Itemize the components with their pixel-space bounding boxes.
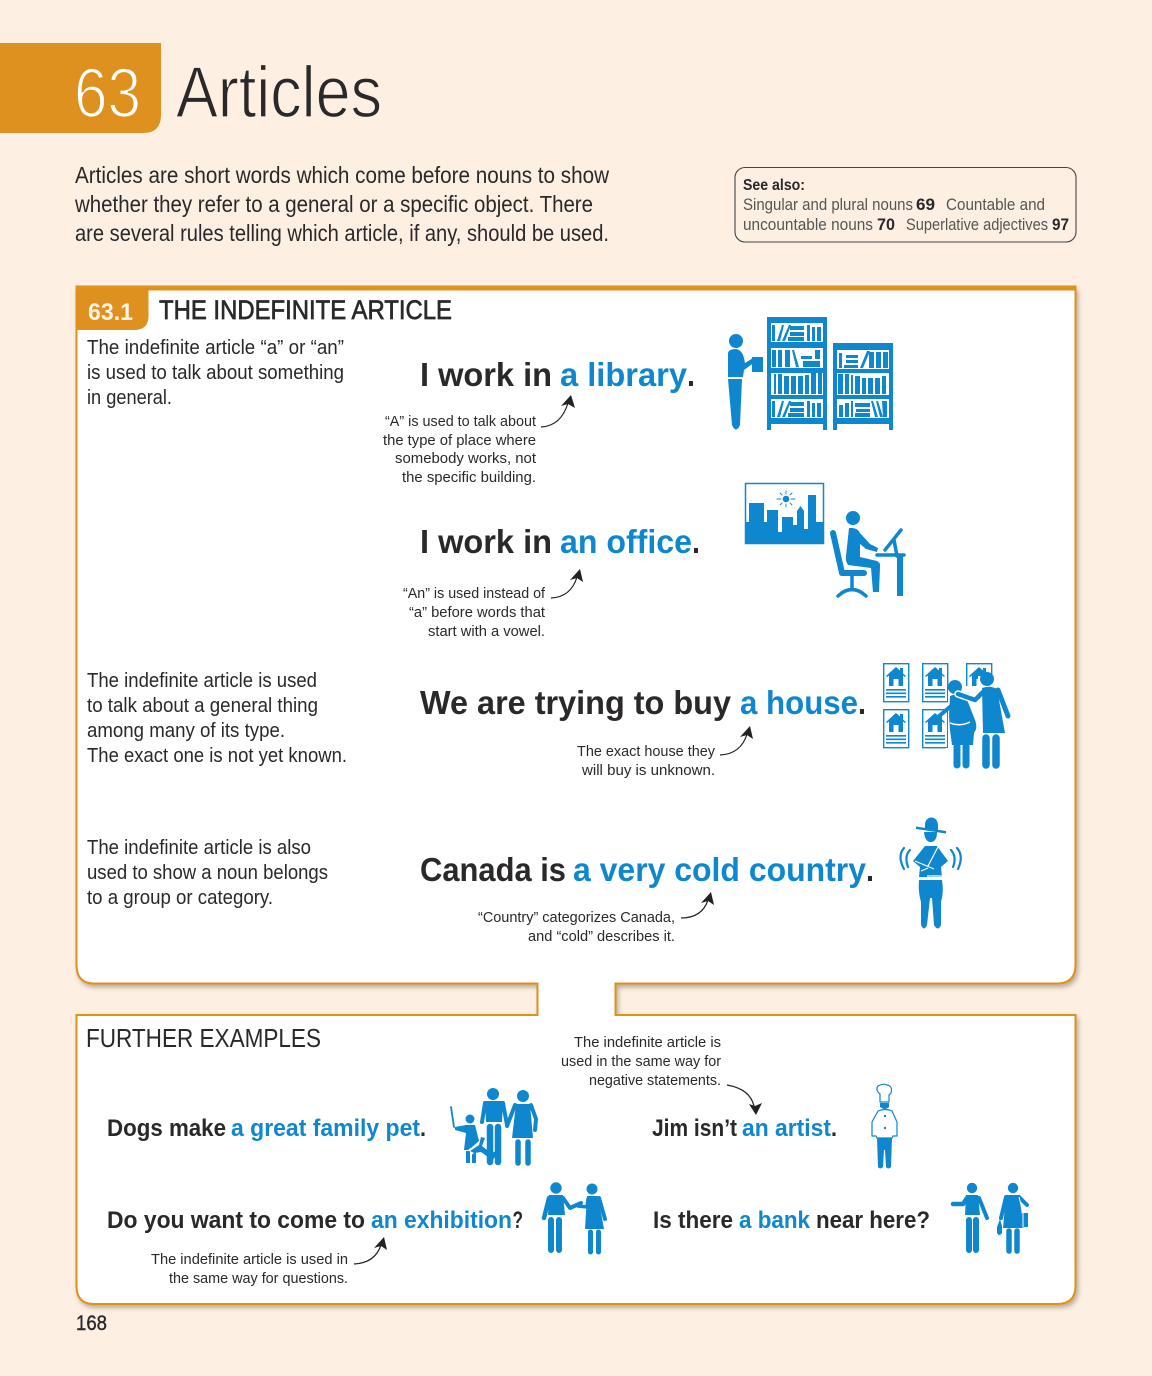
example: artist: Jim isn’t bbox=[652, 1115, 737, 1142]
sentence: library: . bbox=[687, 356, 695, 393]
example: bank: near here? bbox=[816, 1207, 930, 1234]
icon: person at desk bbox=[833, 511, 904, 596]
see also box: 70 bbox=[877, 216, 895, 234]
example: bank bbox=[653, 1207, 930, 1234]
sentence: office bbox=[420, 523, 700, 560]
example: exhibition: Do you want to come to bbox=[107, 1207, 365, 1234]
explanation 2: The indefinite article is used bbox=[87, 670, 317, 692]
sentence: library bbox=[420, 356, 695, 393]
sentence: library: I work in bbox=[420, 356, 552, 393]
note: Canada bbox=[478, 909, 675, 945]
example: exhibition bbox=[107, 1207, 523, 1234]
intro paragraph: Articles are short words which come before nouns to show bbox=[75, 162, 609, 188]
sentence: house: We are trying to buy bbox=[420, 684, 732, 721]
arrow: questions note bbox=[354, 1237, 387, 1264]
icon: city picture bbox=[745, 484, 824, 544]
note: library: “A” is used to talk about bbox=[385, 413, 537, 430]
sentence: library: a library bbox=[560, 356, 688, 393]
note: library: somebody works, not bbox=[395, 450, 537, 467]
note: questions: the same way for questions. bbox=[169, 1270, 348, 1287]
see also box bbox=[735, 168, 1076, 242]
example: bank: a bank bbox=[739, 1207, 811, 1234]
see also box: 97 bbox=[1052, 216, 1069, 234]
example: artist: an artist bbox=[742, 1115, 831, 1142]
example: exhibition: ? bbox=[512, 1207, 523, 1234]
note: negative statements bbox=[561, 1034, 721, 1089]
explanation 3: to a group or category. bbox=[87, 887, 273, 909]
page number: 168 bbox=[76, 1312, 107, 1335]
note: house bbox=[577, 743, 715, 779]
arrow: library note bbox=[541, 395, 575, 427]
note: Canada: and “cold” describes it. bbox=[528, 928, 675, 945]
note: office: “An” is used instead of bbox=[403, 585, 546, 602]
main panel outline with connector bbox=[76, 288, 1076, 1304]
see also box: Superlative adjectives bbox=[906, 216, 1048, 234]
note: office bbox=[403, 585, 546, 640]
header tab: chapter number: 63 bbox=[74, 54, 141, 132]
explanation 2: among many of its type. bbox=[87, 720, 285, 742]
example: dogs: a great family pet bbox=[231, 1115, 420, 1142]
explanation 3: The indefinite article is also bbox=[87, 837, 311, 859]
panel top rule bbox=[76, 286, 1076, 290]
note: negative statements: negative statements. bbox=[589, 1072, 721, 1089]
explanation 2 bbox=[87, 670, 347, 767]
example: bank: Is there bbox=[653, 1207, 733, 1234]
sentence: house: . bbox=[858, 684, 866, 721]
intro paragraph bbox=[74, 162, 609, 246]
explanation 1: in general. bbox=[87, 387, 172, 409]
see also box: Countable and bbox=[946, 196, 1045, 214]
icon: couple talking about exhibition bbox=[544, 1182, 605, 1252]
sentence: Canada: Canada is bbox=[420, 851, 566, 888]
sentence: office: I work in bbox=[420, 523, 552, 560]
explanation 3: used to show a noun belongs bbox=[87, 862, 328, 884]
sentence: Canada bbox=[420, 851, 874, 888]
see also box: uncountable nouns bbox=[743, 216, 873, 234]
explanation 2: to talk about a general thing bbox=[87, 695, 318, 717]
note: library bbox=[383, 413, 537, 486]
note: questions bbox=[151, 1251, 348, 1287]
sentence: Canada: . bbox=[866, 851, 874, 888]
note: library: the specific building. bbox=[402, 469, 536, 486]
example: artist: . bbox=[831, 1115, 837, 1142]
arrow: Canada note bbox=[681, 892, 714, 918]
see also box: See also: bbox=[743, 177, 805, 194]
example: dogs bbox=[107, 1115, 426, 1142]
example: dogs: . bbox=[420, 1115, 426, 1142]
header tab: chapter number bbox=[0, 43, 161, 133]
intro paragraph: are several rules telling which article, if any, should be used. bbox=[75, 220, 609, 246]
note: questions: The indefinite article is used in bbox=[151, 1251, 348, 1268]
explanation 3 bbox=[87, 837, 328, 909]
sentence: Canada: a very cold country bbox=[573, 851, 867, 888]
see also box: 69 bbox=[916, 196, 935, 214]
explanation 1: is used to talk about something bbox=[87, 362, 344, 384]
example: exhibition: an exhibition bbox=[371, 1207, 512, 1234]
sentence: house: a house bbox=[740, 684, 858, 721]
note: office: start with a vowel. bbox=[428, 623, 545, 640]
icon: couple with bags bbox=[953, 1183, 1028, 1251]
section tab 63.1: 63.1 bbox=[88, 299, 133, 326]
explanation 1: The indefinite article “a” or “an” bbox=[87, 337, 344, 359]
icon: librarian and bookshelves bbox=[728, 317, 893, 430]
sentence: office: an office bbox=[560, 523, 692, 560]
icon: shivering mountie bbox=[900, 818, 961, 928]
heading: further examples: FURTHER EXAMPLES bbox=[86, 1023, 321, 1053]
icon: couple viewing house listings bbox=[884, 664, 1012, 770]
title: Articles bbox=[176, 53, 382, 133]
explanation 2: The exact one is not yet known. bbox=[87, 745, 347, 767]
note: office: “a” before words that bbox=[409, 604, 546, 621]
note: negative statements: The indefinite article is bbox=[574, 1034, 721, 1051]
intro paragraph: whether they refer to a general or a specific object. There bbox=[74, 191, 593, 217]
arrow: office note bbox=[551, 569, 583, 598]
example: dogs: Dogs make bbox=[107, 1115, 226, 1142]
sentence: office: . bbox=[692, 523, 700, 560]
note: negative statements: used in the same way for bbox=[561, 1053, 721, 1070]
note: library: the type of place where bbox=[383, 432, 536, 449]
icon: chef bbox=[872, 1084, 897, 1168]
note: Canada: “Country” categorizes Canada, bbox=[478, 909, 675, 926]
note: house: The exact house they bbox=[577, 743, 715, 760]
section heading: THE INDEFINITE ARTICLE bbox=[159, 295, 452, 325]
section tab 63.1 bbox=[76, 290, 148, 330]
arrow: house note bbox=[720, 726, 753, 755]
arrow: negative note bbox=[727, 1085, 762, 1115]
see also box: Singular and plural nouns bbox=[743, 196, 913, 214]
icon: family with dog bbox=[451, 1088, 536, 1165]
explanation 1 bbox=[87, 337, 344, 409]
example: artist bbox=[652, 1115, 837, 1142]
note: house: will buy is unknown. bbox=[581, 762, 715, 779]
